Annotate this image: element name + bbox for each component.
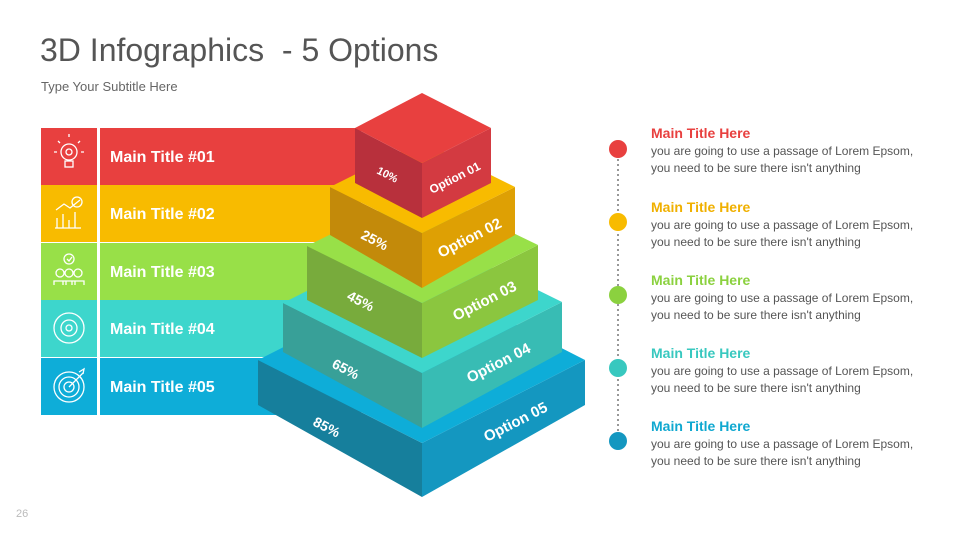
bar 3: Main Title #03 [110,264,215,281]
bar 5 [41,358,361,415]
layer 1: 10% [375,165,400,186]
item 2: you need to be sure there isn't anything [651,235,861,249]
item 1 [651,125,913,175]
item 3 [651,272,913,322]
timeline [609,140,627,450]
item 2 [651,199,913,249]
item 1: Main Title Here [651,125,750,141]
layer 3: Option 03 [450,278,519,325]
bar 1: Main Title #01 [110,149,215,166]
item 4 [651,345,913,395]
item 3: you are going to use a passage of Lorem Epsom, [651,291,913,305]
bar 2: Main Title #02 [110,206,215,223]
title: 3D Infographics - 5 Options [40,32,438,68]
bar 3 [41,243,361,300]
layer 3: 45% [345,287,377,315]
bar 2 [41,185,361,242]
layer 2: Option 02 [435,215,504,262]
layer 3 [307,189,538,358]
layer 1: Option 01 [427,159,483,197]
layer 5 [258,277,585,497]
item 5 [651,418,913,468]
item 1: you are going to use a passage of Lorem Epsom, [651,144,913,158]
item 3: Main Title Here [651,272,750,288]
left bars [41,128,361,415]
bar 4 [41,300,361,357]
layer 5: 85% [311,413,343,441]
layer 1 [355,93,491,218]
divider [97,128,100,416]
layer 4 [283,233,562,428]
layer 4: Option 04 [464,340,534,387]
item 4: you are going to use a passage of Lorem Epsom, [651,364,913,378]
item 5: you are going to use a passage of Lorem Epsom, [651,437,913,451]
layer 5: Option 05 [481,399,550,446]
layer 2: 25% [359,226,391,254]
bar 5: Main Title #05 [110,379,215,396]
item 4: you need to be sure there isn't anything [651,381,861,395]
layer 4: 65% [330,355,362,383]
item 2: you are going to use a passage of Lorem Epsom, [651,218,913,232]
subtitle: Type Your Subtitle Here [41,79,178,94]
icons [53,134,85,403]
item 5: Main Title Here [651,418,750,434]
item 4: Main Title Here [651,345,750,361]
bar 4: Main Title #04 [110,321,215,338]
item 2: Main Title Here [651,199,750,215]
item 1: you need to be sure there isn't anything [651,161,861,175]
item 3: you need to be sure there isn't anything [651,308,861,322]
page number: 26 [16,508,28,520]
bar 1 [41,128,361,185]
item 5: you need to be sure there isn't anything [651,454,861,468]
layer 2 [330,141,515,288]
